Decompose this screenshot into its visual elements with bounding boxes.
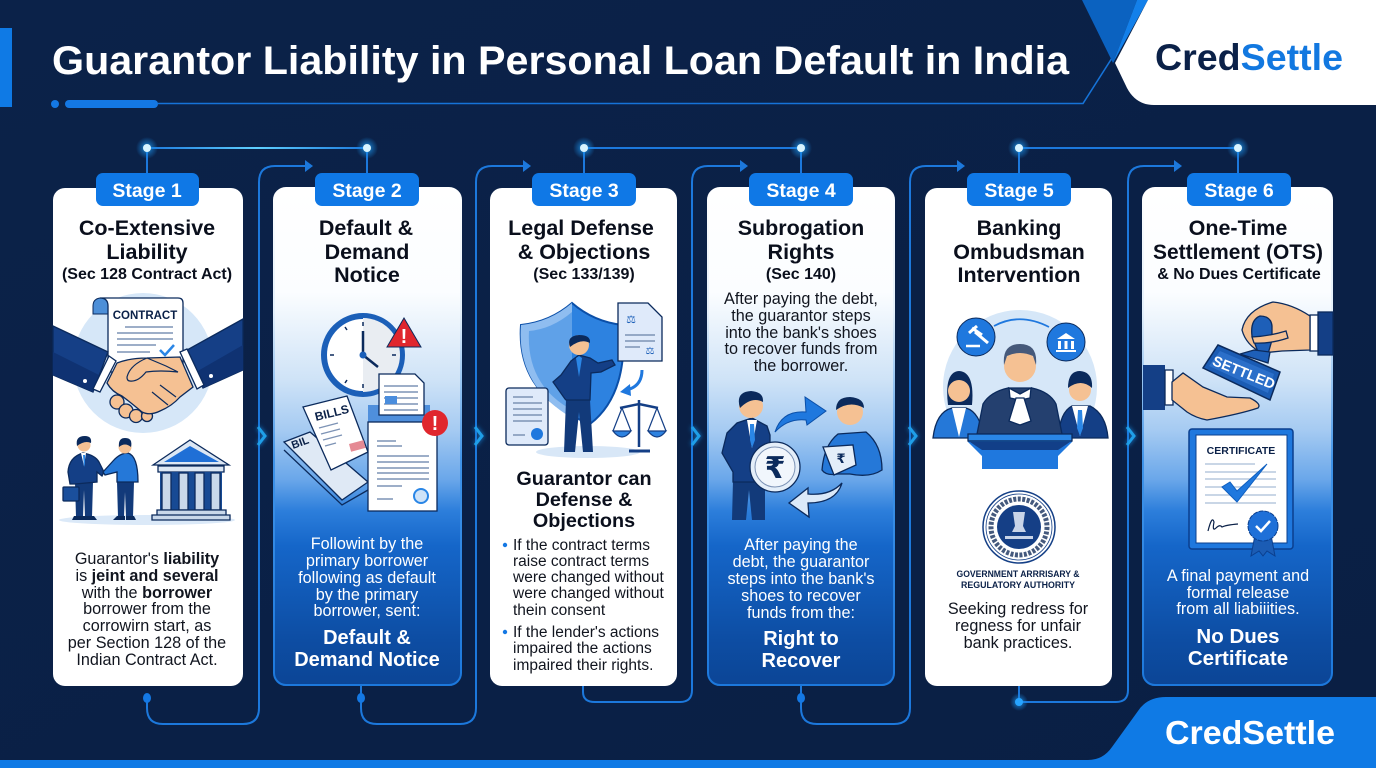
rosette xyxy=(1248,511,1278,556)
stage 4 description: into the bank's shoes xyxy=(725,324,877,342)
stage 3 subheading: Defense & xyxy=(536,489,632,511)
stage 4 description: to recover funds from xyxy=(725,340,877,358)
stage 3 bullet list: impaired the actions xyxy=(513,640,652,657)
stage 3 bullet list: impaired their rights. xyxy=(513,657,653,674)
stage 4 heading: Subrogation xyxy=(738,216,864,240)
stage 2 callout: Default & xyxy=(323,627,411,649)
certificate document xyxy=(506,388,548,445)
borrower figure xyxy=(103,438,138,520)
stage 3 bullet list: were changed without xyxy=(512,569,664,586)
stage 6 heading: & No Dues Certificate xyxy=(1157,266,1321,283)
podium xyxy=(968,434,1072,469)
panel: stage 4 xyxy=(708,173,894,685)
stage 4 lower text: After paying the xyxy=(744,536,858,554)
stage 1 body text: corrowirn start, as xyxy=(83,617,211,635)
stage 2 heading: Demand xyxy=(325,240,409,264)
stage 5 body text: bank practices. xyxy=(964,634,1072,652)
stage 4 heading: (Sec 140) xyxy=(766,266,836,283)
stamp block xyxy=(1203,345,1280,400)
warning triangle: ! xyxy=(401,326,407,348)
stage 4 lower text xyxy=(727,536,875,622)
arrow back to guarantor xyxy=(789,483,842,517)
arrow: stage 2 to stage 3 xyxy=(357,160,531,724)
guarantor figure xyxy=(722,391,770,520)
stage 2 badge xyxy=(315,173,419,206)
icon: certificate xyxy=(1189,429,1293,556)
stage 3 badge: Stage 3 xyxy=(549,180,619,202)
stage 3 subheading xyxy=(516,468,652,532)
bank building xyxy=(152,440,230,520)
stage 2 heading: Notice xyxy=(334,263,400,287)
stage 3 heading: Legal Defense xyxy=(508,216,654,240)
stage 6 heading: Settlement (OTS) xyxy=(1153,240,1323,264)
stage 2 callout: Demand Notice xyxy=(294,649,440,671)
stage 4 badge xyxy=(749,173,853,206)
panel: stage 1 xyxy=(53,173,243,686)
stage 3 bullet list: raise contract terms xyxy=(513,553,649,570)
bank bubble xyxy=(1047,323,1085,361)
warning triangle xyxy=(387,318,421,348)
stage 4 description: After paying the debt, xyxy=(724,290,878,308)
stage 1 body text: with the borrower xyxy=(81,584,213,602)
icon: contract handshake: CONTRACT xyxy=(113,310,177,322)
stage 1 heading xyxy=(62,216,232,283)
icon: contract handshake xyxy=(53,293,243,433)
stage 6 body text: formal release xyxy=(1187,584,1289,602)
stage 6 badge: Stage 6 xyxy=(1204,180,1274,202)
lower hand xyxy=(1143,365,1259,420)
stage 4 description: the guarantor steps xyxy=(731,307,871,325)
stage 4 badge: Stage 4 xyxy=(766,180,836,202)
stage 3 bullet list xyxy=(503,537,664,674)
alert circle xyxy=(422,410,448,436)
scales of justice xyxy=(613,400,666,451)
stage 3 subheading: Objections xyxy=(533,510,635,532)
chevrons between stages xyxy=(258,427,1134,445)
stage 3 subheading: Guarantor can xyxy=(516,468,652,490)
stage 3 bullet list: thein consent xyxy=(513,602,606,619)
stage 5 body text: regness for unfair xyxy=(955,617,1082,635)
arrow: stage 5 to stage 6 xyxy=(1010,160,1182,711)
stage 4 lower text: steps into the bank's xyxy=(727,570,875,588)
stage 4 heading: Rights xyxy=(768,240,834,264)
icon: settled stamp and hands xyxy=(1143,302,1333,420)
title: Guarantor Liability in Personal Loan Default in India xyxy=(52,39,1070,83)
stage 1 body text: Guarantor's liability xyxy=(75,550,219,568)
gavel bubble xyxy=(957,318,995,356)
man figure xyxy=(1058,371,1108,438)
stage 2 body text: Followint by the xyxy=(311,535,423,553)
stage 2 heading: Default & xyxy=(319,216,413,240)
stage 6 callout xyxy=(1188,625,1288,670)
stage 4 callout: Right to xyxy=(763,628,839,650)
stage 5 heading xyxy=(953,216,1085,287)
icon: ombudsman panel xyxy=(933,310,1108,469)
borrower figure xyxy=(822,397,882,475)
stage 6 body text: A final payment and xyxy=(1167,567,1309,585)
icon: regulator seal xyxy=(983,491,1055,563)
arrow: stage 1 to stage 2 xyxy=(143,160,313,724)
stage 2 body text xyxy=(298,535,436,620)
stage 4 description xyxy=(724,290,878,375)
stage 3 bullet list: If the lender's actions xyxy=(513,624,659,641)
top connectors with glowing nodes xyxy=(136,137,1249,175)
icon: clock, bills and notice: BIL xyxy=(290,434,311,452)
stage 2 heading xyxy=(319,216,413,287)
stage 3 bullet list: were changed without xyxy=(512,585,664,602)
document with scale: ⚖ xyxy=(646,346,655,357)
icon: shield, guarantor and scales xyxy=(506,303,666,458)
document with scale xyxy=(618,303,662,361)
stage 5 badge: Stage 5 xyxy=(984,180,1054,202)
bills receipt: BILLS xyxy=(313,402,350,424)
stage 3 heading: (Sec 133/139) xyxy=(533,266,635,283)
panel: stage 5 xyxy=(925,173,1112,686)
stage 1 badge: Stage 1 xyxy=(112,180,182,202)
stage 5 heading: Banking xyxy=(977,216,1061,240)
stage 1 badge xyxy=(96,173,199,206)
panel: stage 2 xyxy=(274,173,461,685)
stage 6 heading xyxy=(1153,216,1323,283)
stage 6 badge xyxy=(1187,173,1291,206)
stage 4 description: the borrower. xyxy=(754,357,848,375)
stage 1 body text: per Section 128 of the xyxy=(68,634,226,652)
stage 6 callout: Certificate xyxy=(1188,647,1288,670)
logo wordmark: CredSettle xyxy=(1155,37,1343,78)
logo panel xyxy=(1082,0,1376,105)
stamp block: SETTLED xyxy=(1210,354,1277,393)
stage 3 heading: & Objections xyxy=(518,240,650,264)
stage 5 heading: Intervention xyxy=(957,263,1081,287)
icon: clock, bills and notice xyxy=(284,316,448,511)
woman figure xyxy=(933,371,984,438)
header rule xyxy=(51,58,1112,108)
arrow to borrower xyxy=(775,397,826,432)
receipt: ₹ xyxy=(836,452,846,467)
stage 6 body text xyxy=(1167,567,1309,618)
arrow: stage 3 to stage 4 xyxy=(583,160,748,702)
rupee coin: ₹ xyxy=(765,451,785,486)
shield xyxy=(521,303,624,424)
stage 2 body text: primary borrower xyxy=(306,552,429,570)
stage 5 body text xyxy=(948,600,1089,652)
icon: subrogation figures and rupee coin xyxy=(722,391,882,520)
stage 6 body text: from all liabiiities. xyxy=(1176,600,1300,618)
icon: certificate: CERTIFICATE xyxy=(1207,445,1275,457)
curved arrow xyxy=(620,370,642,396)
ombudsman figure xyxy=(977,344,1062,434)
stage 3 badge xyxy=(532,173,636,206)
stage 5 badge xyxy=(967,173,1071,206)
demand notice sheet xyxy=(368,422,437,511)
stage 4 lower text: debt, the guarantor xyxy=(733,553,870,571)
arrow: stage 4 to stage 5 xyxy=(797,160,965,724)
alert circle: ! xyxy=(432,413,438,435)
stage 4 lower text: shoes to recover xyxy=(741,587,861,605)
stage 3 bullet list: If the contract terms xyxy=(513,537,650,554)
lower fingers xyxy=(110,395,152,422)
stage 6 callout: No Dues xyxy=(1196,625,1280,648)
stage 1 heading: Liability xyxy=(106,240,188,264)
stage 4 heading xyxy=(738,216,864,283)
regulator caption xyxy=(956,569,1080,590)
footer wordmark: CredSettle xyxy=(1165,714,1335,751)
stage 2 badge: Stage 2 xyxy=(332,180,402,202)
stage 1 body text: Indian Contract Act. xyxy=(76,651,218,669)
stage 1 heading: (Sec 128 Contract Act) xyxy=(62,266,232,283)
stage 1 body text: borrower from the xyxy=(83,600,211,618)
stage 1 body text: is jeint and several xyxy=(75,567,219,585)
regulator caption: GOVERNMENT ARRRISARY & xyxy=(956,569,1080,579)
stage 2 body text: by the primary xyxy=(316,586,419,604)
stage 5 heading: Ombudsman xyxy=(953,240,1085,264)
stage 2 body text: borrower, sent: xyxy=(313,602,421,620)
stage 4 lower text: funds from the: xyxy=(747,604,855,622)
panel: stage 3 xyxy=(490,173,677,686)
stage 3 heading xyxy=(508,216,654,283)
icon: guarantor, borrower and bank xyxy=(59,436,235,525)
stage 4 callout: Recover xyxy=(762,650,841,672)
stage 2 body text: following as default xyxy=(298,569,436,587)
stage 2 callout xyxy=(294,627,440,671)
upper hand with stamp xyxy=(1240,302,1333,363)
panel: stage 6 xyxy=(1143,173,1333,685)
guarantor figure xyxy=(63,436,104,520)
stage 5 body text: Seeking redress for xyxy=(948,600,1089,618)
left accent bar xyxy=(0,28,12,107)
stage 1 heading: Co-Extensive xyxy=(79,216,215,240)
document with scale: ⚖ xyxy=(626,314,636,326)
stage 1 body text xyxy=(68,550,226,669)
regulator caption: REGULATORY AUTHORITY xyxy=(961,580,1075,590)
rupee coin xyxy=(750,442,800,492)
guarantor figure xyxy=(553,335,615,452)
stage 6 heading: One-Time xyxy=(1189,216,1287,240)
stage 4 callout xyxy=(762,628,841,672)
bills receipt xyxy=(303,396,368,470)
receipt xyxy=(823,445,856,475)
footer band xyxy=(0,697,1376,768)
